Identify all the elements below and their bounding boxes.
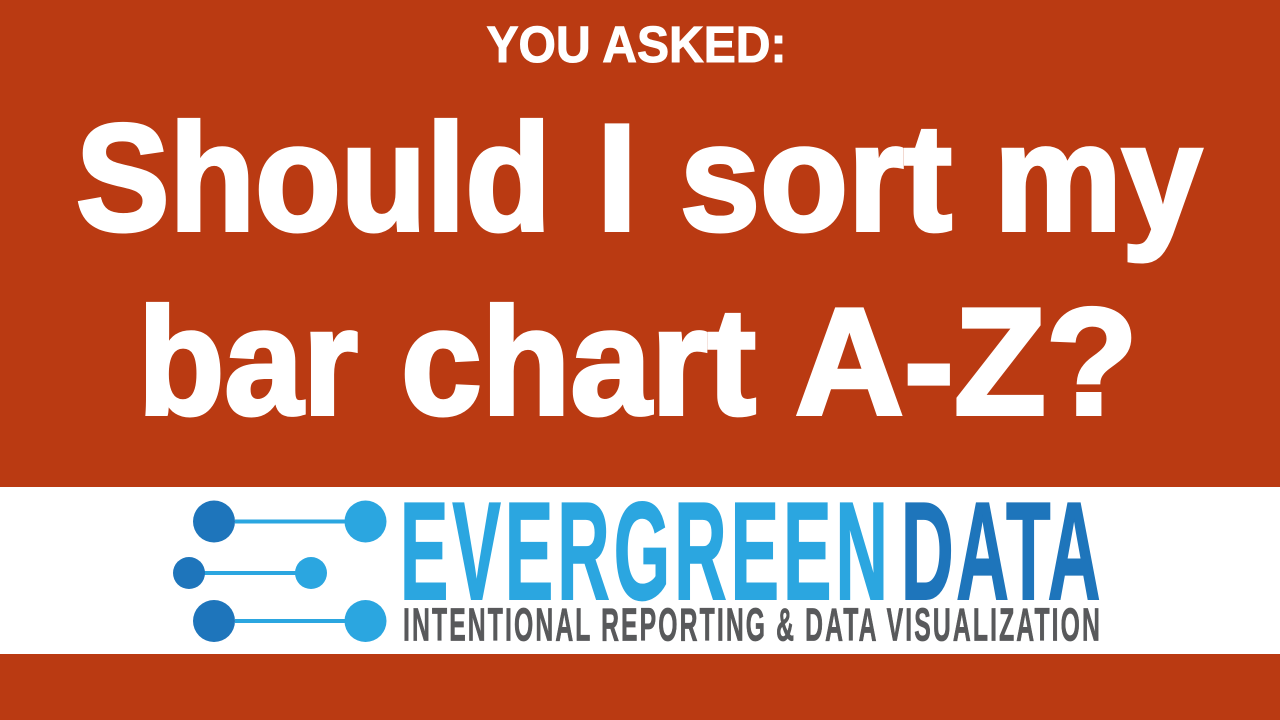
title: bar bbox=[138, 277, 358, 447]
title: Should bbox=[76, 93, 551, 263]
icon: connected dots bbox=[173, 500, 386, 642]
logo band bbox=[0, 474, 1280, 654]
eyebrow heading: YOU ASKED: bbox=[486, 16, 786, 73]
title: A-Z? bbox=[795, 277, 1138, 447]
logo wordmark: DATA: DATA bbox=[901, 474, 1103, 629]
title: sort bbox=[680, 93, 952, 263]
title: I bbox=[597, 93, 637, 263]
title: chart bbox=[401, 277, 756, 447]
title bbox=[76, 93, 1202, 447]
title: my bbox=[994, 93, 1202, 263]
